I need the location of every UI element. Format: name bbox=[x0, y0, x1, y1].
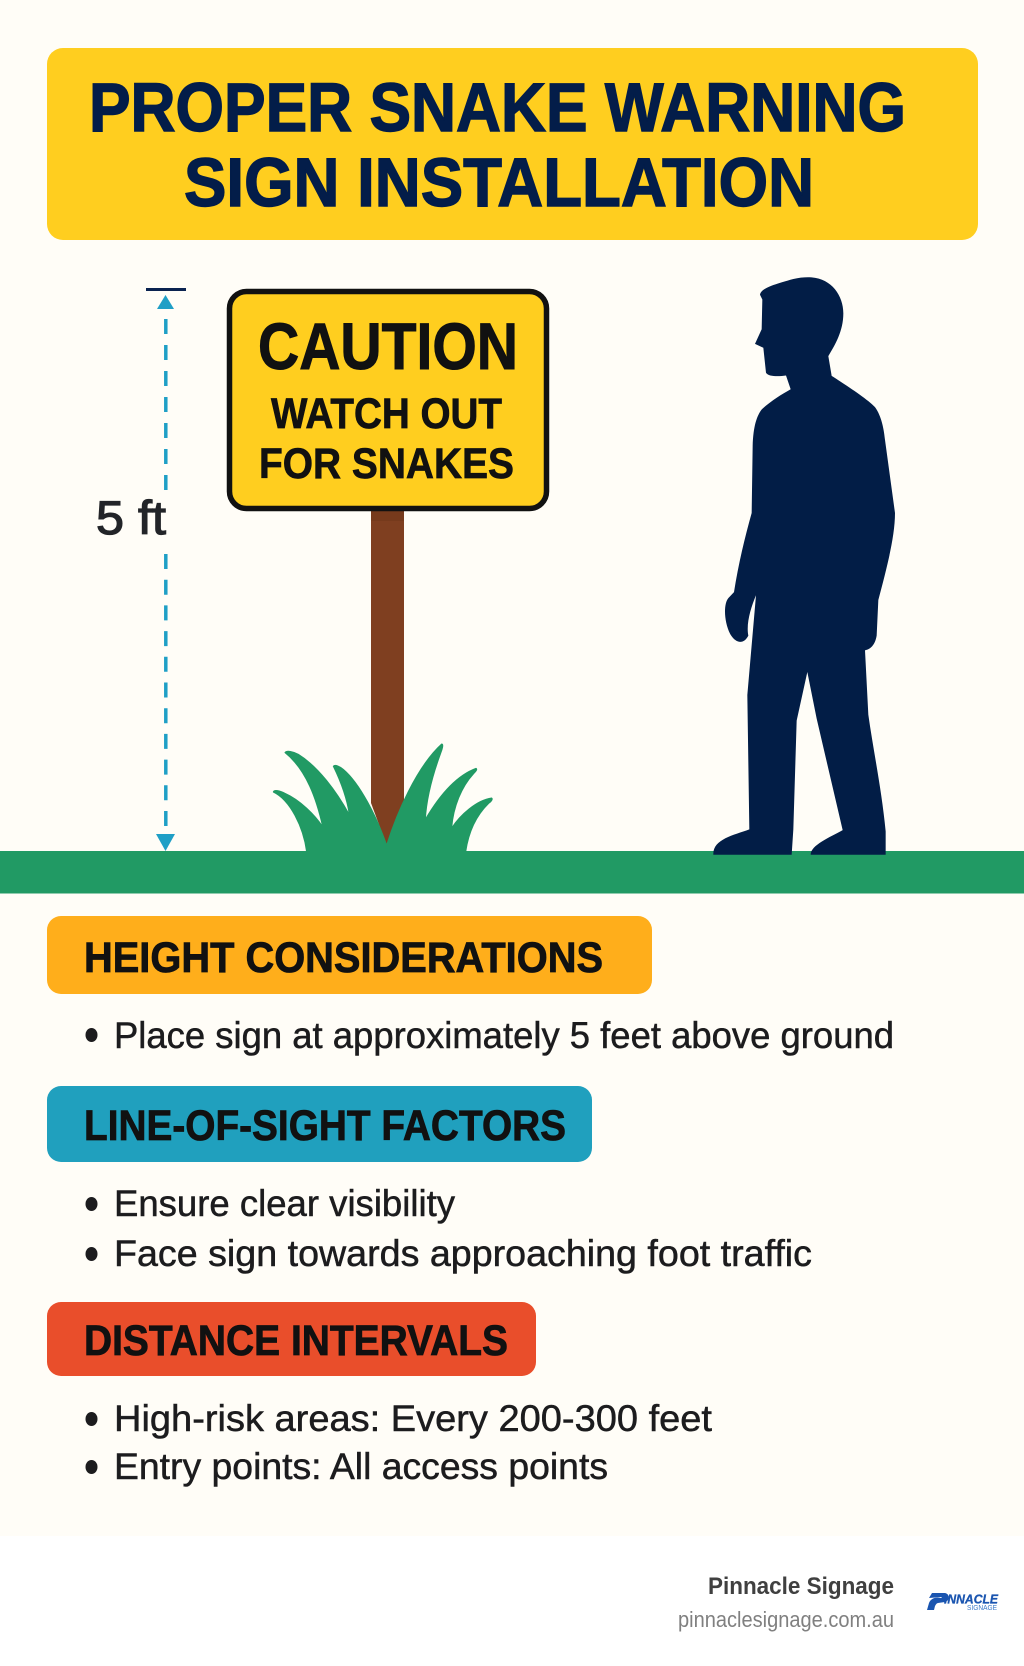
section: height considerations bbox=[47, 916, 894, 1056]
heading pill: height considerations bbox=[47, 916, 652, 994]
sign text: watch out: WATCH OUT bbox=[271, 390, 502, 438]
caution sign bbox=[230, 292, 546, 508]
heading pill: distance intervals bbox=[47, 1302, 536, 1376]
footer credit: Pinnacle Signage bbox=[708, 1573, 894, 1600]
sign text: for snakes: FOR SNAKES bbox=[259, 440, 514, 488]
sign post bbox=[371, 511, 404, 846]
title banner bbox=[47, 48, 978, 240]
logo: Pinnacle Signage: INNACLE bbox=[944, 1592, 999, 1606]
sign text: caution: CAUTION bbox=[258, 309, 518, 383]
section: line-of-sight factors bbox=[47, 1086, 812, 1274]
heading pill: height considerations: HEIGHT CONSIDERATIONS bbox=[84, 934, 603, 982]
footer credit bbox=[678, 1573, 894, 1632]
person silhouette bbox=[713, 277, 895, 855]
logo: Pinnacle Signage bbox=[927, 1592, 999, 1612]
bullet: clear visibility: Ensure clear visibility bbox=[114, 1183, 455, 1224]
bullet: high-risk areas: High-risk areas: Every 200-300 feet bbox=[114, 1398, 713, 1439]
heading pill: line-of-sight factors bbox=[47, 1086, 592, 1162]
footer credit: pinnaclesignage.com.au bbox=[678, 1607, 894, 1632]
heading pill: line-of-sight factors: LINE-OF-SIGHT FACTORS bbox=[84, 1102, 566, 1150]
bullet: entry points: Entry points: All access points bbox=[114, 1446, 608, 1487]
logo: Pinnacle Signage: SIGNAGE bbox=[967, 1605, 997, 1612]
height measure: 5 ft dashed arrow bbox=[96, 288, 186, 851]
title banner: PROPER SNAKE WARNING bbox=[89, 69, 906, 146]
section: distance intervals bbox=[47, 1302, 713, 1487]
label: 5 ft: 5 ft bbox=[96, 491, 166, 544]
bullet: face sign: Face sign towards approaching foot traffic bbox=[114, 1233, 812, 1274]
icon: grass tuft bbox=[273, 744, 492, 852]
heading pill: distance intervals: DISTANCE INTERVALS bbox=[84, 1317, 508, 1365]
title banner: SIGN INSTALLATION bbox=[184, 144, 814, 221]
bullet: place sign: Place sign at approximately 5 feet above ground bbox=[114, 1015, 894, 1056]
ground strip bbox=[0, 851, 1024, 894]
